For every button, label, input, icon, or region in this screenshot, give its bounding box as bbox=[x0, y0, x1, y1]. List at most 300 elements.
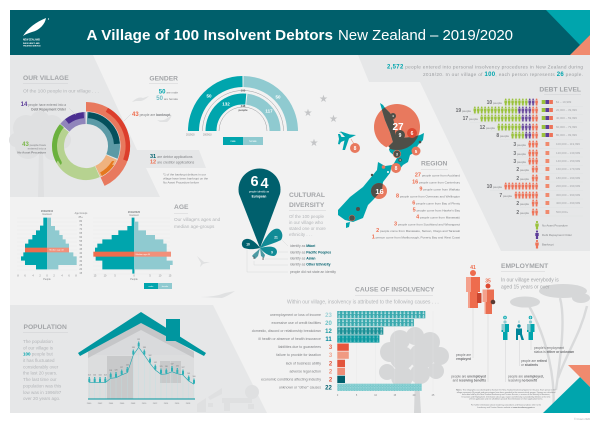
callout: bankrupt: 43 people are bankrupt. bbox=[132, 112, 171, 118]
population values: 100 bbox=[192, 376, 196, 378]
employment labels: status is either or unknown bbox=[534, 350, 574, 354]
population values: 162 bbox=[148, 355, 152, 357]
row counts: 3 people bbox=[513, 159, 526, 165]
population x axis: 2008 bbox=[131, 403, 136, 405]
age axis labels: 40 bbox=[79, 252, 83, 255]
chart: droplet and petals bbox=[238, 168, 282, 261]
house: roof bbox=[78, 312, 206, 356]
row counts bbox=[456, 100, 529, 216]
pyramid titles: 2009/2010 bbox=[41, 209, 54, 213]
callout: no asset procedure: No Asset Procedure bbox=[17, 150, 46, 154]
house illustration bbox=[78, 312, 206, 399]
decorative stars: ★ bbox=[329, 114, 338, 125]
cause values: 3 bbox=[329, 345, 333, 351]
chart labels: 117 bbox=[265, 108, 273, 114]
row counts: 8 people bbox=[496, 133, 509, 139]
employment labels: and receiving benefits bbox=[453, 378, 486, 382]
map markers: 27 bbox=[392, 122, 404, 133]
cause labels: adverse legal action bbox=[289, 370, 321, 374]
population values: 188 bbox=[132, 347, 135, 349]
pyramid x axes: 0 bbox=[133, 274, 135, 278]
age axis labels: 45 bbox=[79, 248, 83, 251]
debt ranges: 120,000 – 139,999 bbox=[556, 151, 581, 155]
callout: no asset procedure bbox=[17, 142, 46, 154]
population x axis: 2012 bbox=[153, 403, 158, 405]
heading: cultural diversity bbox=[289, 192, 326, 211]
body text: cultural diversity: stated one or more bbox=[289, 226, 326, 231]
year labels bbox=[186, 134, 212, 136]
pyramid x axes: 0 bbox=[46, 274, 48, 278]
row counts: 2 people bbox=[516, 176, 529, 182]
region list: 3 people come from Southland and Whanganui bbox=[394, 222, 460, 228]
footnote: For further information about insolvency procedures and financial advice refer to the bbox=[471, 404, 541, 406]
population values: 131 bbox=[176, 366, 179, 368]
logo text: TRUSTEE SERVICE bbox=[23, 46, 41, 48]
population values: 129 bbox=[160, 366, 162, 368]
age axis labels: 85+ bbox=[79, 216, 83, 219]
age legend: female bbox=[162, 286, 169, 288]
decorative stars: ★ bbox=[319, 94, 328, 105]
gender legend: female bbox=[249, 140, 257, 143]
age axis labels: 60 bbox=[79, 236, 83, 239]
header corner: teal triangle bbox=[546, 10, 590, 45]
debt legend: Debt Repayment Order bbox=[542, 233, 572, 237]
region list: 6 people come from Bay of Plenty bbox=[412, 200, 460, 206]
person: employed: 41 bbox=[470, 265, 476, 271]
decorative stars: ★ bbox=[310, 138, 319, 149]
petal labels: 5 bbox=[262, 257, 264, 261]
pyramid x axes: 15 bbox=[169, 274, 172, 278]
pyramid: 2009/10: Median age 44 bbox=[49, 250, 64, 252]
debt ranges: 180,000 – 199,999 bbox=[556, 176, 581, 180]
note: bankrupt before: *1 of the bankrupt debtors in our bbox=[163, 172, 206, 176]
debt ranges bbox=[556, 100, 581, 214]
age axis labels: 50 bbox=[79, 244, 83, 247]
age axis labels: 35 bbox=[79, 256, 83, 259]
cause axis bbox=[337, 394, 435, 397]
population x axis: 2014 bbox=[164, 403, 169, 405]
ethnicity list: identify as Asian bbox=[290, 256, 315, 260]
pyramid x axes: 10 bbox=[159, 274, 162, 278]
region list: 16 people come from Canterbury bbox=[412, 180, 460, 186]
heading: cause of insolvency: CAUSE OF INSOLVENCY bbox=[355, 286, 435, 294]
heading: cultural diversity: CULTURAL bbox=[289, 192, 325, 199]
heading: population: POPULATION bbox=[24, 324, 67, 331]
body text: population: The last time our bbox=[23, 377, 57, 382]
chart labels bbox=[206, 88, 281, 114]
population x axis: 2018 bbox=[186, 403, 191, 405]
pyramid x axes: 6 bbox=[24, 274, 26, 278]
body text: age: median age-groups bbox=[174, 224, 215, 229]
pyramid x axes: 4 bbox=[32, 274, 34, 278]
panel: age bbox=[17, 204, 221, 289]
decorative stars: ★ bbox=[304, 108, 313, 119]
employment labels: employed bbox=[456, 357, 471, 361]
employment labels: people's employment bbox=[534, 346, 564, 350]
footnote: village represents 26 people and percentages have been rounded to the nearest whole person. Figures are calculated bbox=[457, 391, 555, 394]
panel: gender bbox=[149, 76, 292, 145]
gender legend bbox=[223, 137, 263, 145]
logo: fern bbox=[23, 18, 49, 36]
body text: cultural diversity: in our village who bbox=[289, 220, 323, 225]
map markers bbox=[349, 113, 421, 221]
map markers: 5 bbox=[415, 149, 418, 154]
age axis labels: 65 bbox=[79, 232, 83, 235]
gender totals: 50 are female bbox=[156, 96, 178, 102]
body text: population: 100 people but bbox=[23, 352, 54, 357]
population values: 120 bbox=[114, 370, 118, 372]
population values: 118 bbox=[109, 370, 112, 372]
body text: age bbox=[174, 217, 221, 229]
population x axis: 2016 bbox=[175, 403, 180, 405]
cause values: 2 bbox=[329, 370, 333, 376]
body text: employment: aged 15 years or over bbox=[501, 284, 550, 290]
ethnicity list: identify as Māori bbox=[290, 244, 315, 248]
donut chart bbox=[29, 89, 143, 203]
chart labels: 100 bbox=[241, 88, 246, 92]
corner: orange triangle bbox=[568, 365, 590, 387]
house: chimney bbox=[166, 319, 180, 341]
population values: 134 bbox=[126, 364, 129, 366]
pyramid titles: 2019/2020 bbox=[128, 210, 141, 214]
body text: employment: In our village everybody is bbox=[501, 278, 559, 284]
region list: 1 person come from Marlborough, Poverty Bay and West Coast bbox=[372, 234, 460, 240]
panel background: our village bbox=[10, 55, 206, 197]
debt ranges: 300,000 – 399,999 bbox=[556, 193, 581, 197]
chart labels: 448 bbox=[241, 104, 246, 108]
note: bankrupt before bbox=[163, 172, 208, 184]
petal labels bbox=[246, 236, 278, 261]
pyramid x axes: 2 bbox=[39, 274, 41, 278]
pyramid x axes: 6 bbox=[68, 274, 70, 278]
cause values: 12 bbox=[325, 329, 332, 335]
copyright: © Crown 2020 bbox=[574, 418, 591, 421]
semi-circular chart bbox=[194, 82, 292, 131]
debt ranges: 100,000 – 119,999 bbox=[556, 142, 580, 146]
population x axis bbox=[87, 403, 191, 405]
map markers: 8 bbox=[395, 166, 398, 172]
population values: 127 bbox=[120, 367, 123, 369]
body text: population: population was this bbox=[23, 384, 62, 388]
map markers: 3 bbox=[396, 152, 398, 156]
cause values: 2 bbox=[329, 362, 333, 368]
pyramid x axes: 10 bbox=[104, 274, 107, 278]
logo text: NEW ZEALAND bbox=[23, 38, 40, 42]
chart labels: people bbox=[238, 108, 248, 112]
debt ranges: 20,000 – 39,999 bbox=[556, 108, 577, 112]
map markers: 4 bbox=[392, 114, 394, 118]
age axis labels: 25 bbox=[79, 264, 83, 267]
tree: cause background bbox=[379, 327, 449, 413]
population values bbox=[88, 339, 196, 378]
subheading: our village: Of the 100 people in our village . . . bbox=[23, 88, 99, 94]
debt ranges: 140,000 – 159,999 bbox=[556, 159, 581, 163]
age axis labels: 55 bbox=[79, 240, 83, 243]
body text: population: low was in 1996/97 bbox=[23, 390, 62, 395]
cause labels: lack of business ability bbox=[286, 362, 321, 366]
callout: bankrupt bbox=[124, 112, 171, 121]
cause labels bbox=[252, 313, 321, 390]
pyramid titles: Insolvent bbox=[129, 214, 139, 217]
chart labels: 132 bbox=[222, 102, 230, 106]
callout: debtor and creditor applications: 12 are creditor applications bbox=[150, 160, 195, 166]
heading: cultural diversity: DIVERSITY bbox=[289, 202, 325, 209]
cause axis: 5 bbox=[356, 394, 358, 397]
logo text bbox=[23, 38, 41, 48]
body text: population: it has fluctuated bbox=[23, 358, 55, 363]
row counts: 17 people bbox=[463, 116, 478, 122]
body text: population: The population bbox=[23, 339, 53, 344]
debt ranges: $1 – 19,999 bbox=[556, 100, 572, 104]
employment labels: people are retired bbox=[521, 359, 547, 363]
employment labels: people are bbox=[456, 353, 471, 357]
employment labels: people are unemployed, bbox=[508, 374, 544, 378]
tree: our village background bbox=[9, 111, 71, 197]
body text: employment bbox=[501, 278, 559, 290]
note: bankrupt before: village have been bankrupt on the bbox=[163, 176, 208, 180]
corner: teal triangle bbox=[543, 377, 590, 413]
body text: population: considerably over bbox=[23, 364, 59, 370]
callout: debt repayment order bbox=[21, 102, 76, 115]
year labels: 2019/20 bbox=[186, 134, 195, 136]
body text: population: over 20 years ago. bbox=[23, 396, 60, 401]
callout: debtor and creditor applications: 31 are debtor applications bbox=[150, 154, 193, 160]
row counts: 19 people bbox=[456, 108, 471, 114]
employment labels: people are unemployed bbox=[451, 374, 486, 378]
cause axis: 20 bbox=[413, 394, 416, 397]
map markers: 6 bbox=[411, 131, 414, 137]
population x axis: 2010 bbox=[142, 403, 147, 405]
cause labels: liabilities due to guarantees bbox=[278, 345, 321, 349]
intro text: 2,572 people entered into personal insolvency procedures in New Zealand during bbox=[387, 64, 583, 70]
map markers: 16 bbox=[375, 187, 384, 196]
footnote: of their application and not all debtors provide this information on their application forms. bbox=[469, 398, 543, 401]
debt legend: Bankrupt bbox=[542, 242, 554, 246]
heading: employment: EMPLOYMENT bbox=[501, 263, 549, 270]
chart labels: 50 bbox=[206, 94, 212, 98]
axis grid bbox=[337, 311, 433, 392]
heading: our village: OUR VILLAGE bbox=[23, 75, 69, 82]
gender totals bbox=[156, 90, 178, 102]
header banner bbox=[10, 10, 590, 55]
region list bbox=[372, 172, 460, 240]
debt legend: No Asset Procedure bbox=[542, 224, 568, 228]
map: New Zealand bbox=[338, 103, 424, 228]
map markers: 4 bbox=[399, 159, 401, 162]
employment labels: or students bbox=[521, 363, 538, 367]
ethnicity list: identify as Other Ethnicity bbox=[290, 262, 331, 266]
panel: our village bbox=[17, 75, 208, 203]
debt ranges: 200,000 – 299,999 bbox=[556, 184, 581, 188]
population values: 104 bbox=[93, 374, 96, 376]
region list: 2 people come from Manawatu, Nelson, Otago and Taranaki bbox=[376, 228, 460, 234]
droplet label: people identify as bbox=[249, 190, 270, 194]
population values: 109 bbox=[187, 373, 190, 375]
callout: no asset procedure: 43 people have bbox=[22, 142, 46, 148]
population values: 104 bbox=[98, 374, 102, 376]
tree: employment background bbox=[510, 284, 590, 413]
pyramid grid lines bbox=[17, 218, 170, 274]
population x axis: 2006 bbox=[120, 403, 125, 405]
intro text bbox=[387, 64, 583, 78]
ethnicity leader lines bbox=[247, 240, 288, 272]
panel: employment bbox=[451, 263, 574, 382]
leader lines bbox=[473, 308, 531, 382]
body text: population: of our village is bbox=[23, 346, 54, 350]
row counts: 2 people bbox=[516, 210, 529, 216]
logo text: INSOLVENCY AND bbox=[23, 42, 40, 45]
cause values: 23 bbox=[325, 313, 332, 319]
age legend: male bbox=[149, 286, 154, 288]
population x axis: 2000 bbox=[87, 403, 92, 405]
region list: 9 people come from Waikato bbox=[419, 186, 460, 192]
footnote: Innovation and Employment. Information about age, region and ethnicity is provided by debtors at the time bbox=[462, 395, 550, 398]
pyramid x axes: 5 bbox=[149, 274, 151, 278]
pyramid: 2019/20 bbox=[93, 218, 173, 274]
callout: debt repayment order: Debt Repayment Order bbox=[31, 108, 67, 112]
title: A Village of 100 Insolvent Debtors bbox=[86, 27, 333, 44]
chart labels: 50 bbox=[275, 94, 281, 100]
icon: plane bbox=[338, 132, 356, 150]
row counts: 3 people bbox=[513, 151, 526, 157]
region list: 8 people come from Overseas and Wellington bbox=[396, 194, 460, 200]
pyramid x axes: 8 bbox=[75, 274, 77, 278]
body text: population bbox=[23, 339, 62, 401]
map markers: 9 bbox=[399, 133, 402, 139]
pyramid x axes: 15 bbox=[94, 274, 97, 278]
heading: debt level: DEBT LEVEL bbox=[539, 86, 581, 94]
panel: debt level bbox=[456, 86, 583, 248]
petal labels: 10 bbox=[246, 242, 250, 246]
cause values: 3 bbox=[329, 353, 333, 359]
debt ranges: 400,000 – 499,999 bbox=[556, 201, 581, 205]
callout: debtor and creditor applications bbox=[150, 154, 195, 166]
row separators bbox=[470, 106, 583, 216]
ethnicity list: people did not state an identity bbox=[290, 270, 336, 274]
ethnicity list bbox=[290, 244, 336, 274]
row counts: 2 people bbox=[516, 167, 529, 173]
debt ranges: 60,000 – 79,999 bbox=[556, 125, 577, 129]
age axis labels: 70 bbox=[79, 228, 83, 231]
decorative birds bbox=[132, 96, 235, 298]
employment labels: receiving no benefit bbox=[508, 378, 538, 382]
petal labels: 9 bbox=[271, 250, 273, 254]
population values: 188 bbox=[143, 347, 146, 349]
population values: 130 bbox=[165, 366, 168, 368]
population x axis: 2002 bbox=[98, 403, 103, 405]
gender totals: 50 are male bbox=[159, 90, 178, 96]
population values: 212 bbox=[137, 339, 140, 341]
petal labels: 5 bbox=[253, 256, 255, 260]
population values: 127 bbox=[182, 367, 184, 369]
cause labels: domestic, discord or relationship breakdown bbox=[252, 329, 321, 333]
droplet label: European bbox=[252, 194, 266, 198]
pyramid: 2009/10 bbox=[21, 218, 77, 269]
body text: cultural diversity: Of the 100 people bbox=[289, 214, 324, 219]
year labels: 2009/10 bbox=[203, 134, 212, 136]
intro text: 2019/20. In our village of 100, each person represents 26 people. bbox=[423, 72, 583, 78]
cause axis: 0 bbox=[337, 394, 339, 397]
body text: cultural diversity: ethnicity . . . bbox=[289, 232, 312, 237]
decorative stars bbox=[304, 94, 338, 149]
row counts: 10 people bbox=[487, 184, 502, 190]
population values: 142 bbox=[154, 362, 157, 364]
heading: age: AGE bbox=[174, 204, 189, 211]
employment labels bbox=[451, 346, 574, 382]
population values: 104 bbox=[88, 374, 91, 376]
age axis labels: 15 bbox=[79, 272, 83, 275]
panel background: population bbox=[10, 305, 267, 413]
age axis labels: Age Groups bbox=[75, 212, 88, 215]
footnote: Insolvency and Trustee Service website at www.insolvency.govt.nz bbox=[477, 406, 535, 409]
pyramid x axes: 5 bbox=[114, 274, 116, 278]
ethnicity list: identify as Pacific Peoples bbox=[290, 250, 331, 254]
region list: 4 people come from Manawatū bbox=[416, 214, 460, 220]
gender legend: male bbox=[230, 140, 236, 143]
cause labels: unemployment or loss of income bbox=[270, 313, 321, 317]
row counts: 7 people bbox=[499, 193, 512, 199]
age axis labels: 75 bbox=[79, 224, 83, 227]
population people icons bbox=[88, 342, 195, 384]
region list: 27 people come from Auckland bbox=[415, 172, 460, 178]
body text: cultural diversity bbox=[289, 214, 326, 237]
cause bars bbox=[337, 311, 425, 391]
debt ranges: 40,000 – 59,999 bbox=[556, 116, 577, 120]
row counts: 12 people bbox=[480, 125, 495, 131]
cause values bbox=[325, 313, 333, 392]
cause axis: 15 bbox=[393, 394, 397, 397]
heading: region: REGION bbox=[421, 160, 448, 168]
note: bankrupt before: No Asset Procedure before bbox=[163, 180, 199, 184]
population values: 104 bbox=[104, 374, 107, 376]
panel: population bbox=[23, 312, 206, 405]
person: status unknown: 9 bbox=[530, 316, 532, 320]
cause labels: failure to provide for taxation bbox=[276, 353, 321, 357]
footnote bbox=[456, 388, 556, 409]
panel: cause of insolvency bbox=[252, 286, 439, 397]
debt ranges: 80,000 – 99,999 bbox=[556, 133, 577, 137]
pyramid x axes bbox=[17, 274, 172, 281]
droplet label bbox=[249, 174, 270, 198]
panel: region bbox=[338, 103, 460, 240]
row counts: 10 people bbox=[487, 100, 502, 106]
pictogram rows bbox=[473, 98, 538, 216]
callout: no asset procedure: entered into a bbox=[28, 146, 46, 150]
pyramid x axes: People bbox=[130, 278, 138, 281]
cause labels: excessive use of credit facilities bbox=[272, 321, 321, 325]
droplet label: 6 bbox=[250, 174, 259, 190]
body text: age: Our village's ages and bbox=[174, 217, 221, 222]
callout: debt repayment order: 14 people have entered into a bbox=[21, 102, 66, 108]
cause labels: unknown or "other" causes bbox=[279, 386, 321, 390]
age axis labels: 20 bbox=[79, 268, 83, 271]
body text: population: the last 20 years. bbox=[23, 371, 57, 376]
decorative houses bbox=[197, 385, 259, 412]
person: retired or students: 6 bbox=[518, 320, 520, 324]
cause values: 22 bbox=[325, 386, 332, 392]
panel: cultural diversity bbox=[238, 168, 336, 274]
cause axis: 10 bbox=[374, 394, 378, 397]
row counts: 2 people bbox=[516, 201, 529, 207]
pyramid: 2019/20: Median age 46 bbox=[136, 254, 151, 256]
region list: 5 people come from Hawke's Bay bbox=[413, 208, 460, 214]
cause values: 2 bbox=[329, 378, 333, 384]
mini level squares bbox=[542, 100, 553, 214]
pyramid x axes: People bbox=[43, 278, 51, 281]
plane connector bbox=[351, 139, 354, 144]
age axis labels: 30 bbox=[79, 260, 83, 263]
population x axis: 2004 bbox=[109, 403, 114, 405]
